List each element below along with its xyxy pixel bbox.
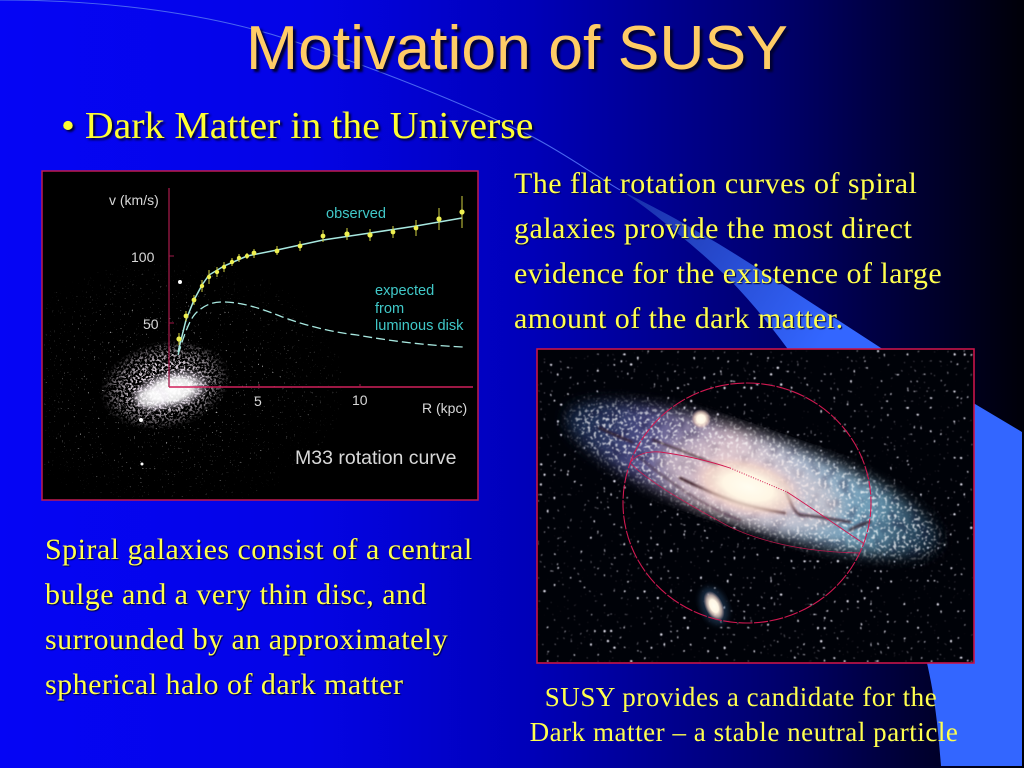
text block: flat rotation curves: The flat rotation curves of spiral [514,167,917,200]
dust lanes [600,428,870,530]
bullet heading: • Dark Matter in the Universe [61,105,533,147]
curve labels [326,206,464,334]
chart caption: M33 rotation curve [295,447,456,469]
bulge glow [649,423,851,547]
star field [538,350,973,662]
galaxy disk [558,392,948,568]
curve labels: observed [326,206,386,222]
caption: SUSY candidate [530,682,958,747]
text block: flat rotation curves: amount of the dark matter. [514,302,844,335]
axis labels: 10 [352,392,368,408]
curve labels: luminous disk [375,318,464,334]
sparse star field of M33 [44,262,354,498]
caption: SUSY candidate: SUSY provides a candidate for the [545,682,937,712]
axis labels: 100 [131,249,155,265]
axis labels: 5 [254,393,262,409]
chart: M33 rotation curve [41,170,479,501]
text block: flat rotation curves [514,167,942,335]
M33 galaxy core [101,280,229,466]
expected curve from luminous disk [178,302,463,355]
photo border [537,349,974,663]
text block: spiral galaxies [45,533,473,702]
dark matter halo overlay [623,383,871,623]
galaxy bulge [682,442,814,532]
text block: spiral galaxies: Spiral galaxies consist of a central [45,533,473,566]
photo: Andromeda galaxy with halo overlay [536,348,975,664]
curve labels: from [375,301,404,317]
text block: flat rotation curves: evidence for the existence of large [514,257,942,290]
axes [169,188,473,387]
observed curve with data points [176,196,465,352]
axis labels: R (kpc) [422,400,467,416]
text block: flat rotation curves: galaxies provide the most direct [514,212,912,245]
axis labels: 50 [143,316,159,332]
satellite galaxy: lower [694,582,734,630]
text block: spiral galaxies: spherical halo of dark matter [45,668,403,701]
axis labels [109,192,467,416]
text block: spiral galaxies: surrounded by an approximately [45,623,448,656]
title: Motivation of SUSY [246,13,788,83]
caption: SUSY candidate: Dark matter – a stable neutral particle [530,717,958,747]
text block: spiral galaxies: bulge and a very thin disc, and [45,578,427,611]
curve labels: expected [375,283,434,299]
axis labels: v (km/s) [109,192,159,208]
satellite galaxy: upper [691,409,711,429]
